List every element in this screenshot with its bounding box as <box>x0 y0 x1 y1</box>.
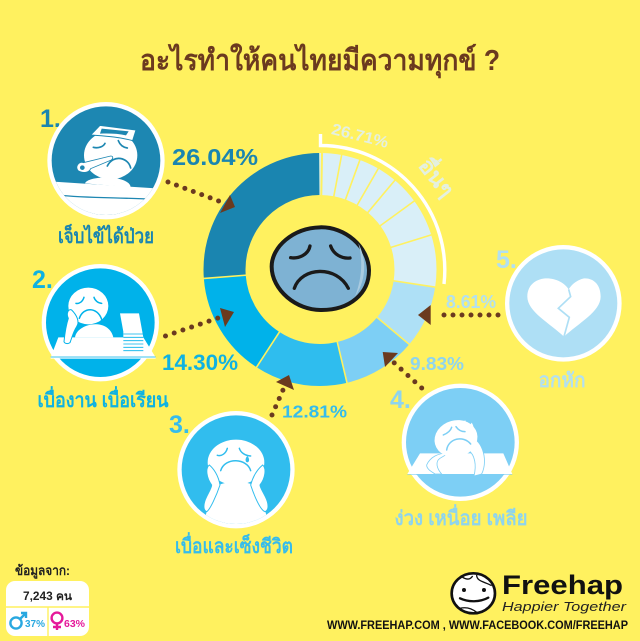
icon: bored at desk <box>42 264 159 381</box>
percent: cause 5: 8.61% <box>446 292 496 312</box>
male share: 37% <box>25 619 45 630</box>
source card background <box>6 581 89 636</box>
percent: cause 2: 14.30% <box>162 350 238 375</box>
icon: sick face with thermometer <box>47 102 165 223</box>
panel: cause 5 heartbroken <box>496 245 622 392</box>
female share: 63% <box>64 619 85 630</box>
icon: sad face centre <box>272 227 369 310</box>
arrow: cause 4 to segment <box>383 352 422 388</box>
icon: broken heart <box>505 245 622 362</box>
rank number 1: 1. <box>40 105 61 133</box>
panel: cause 1 sick <box>40 102 165 248</box>
label: sleepy, tired, exhausted: ง่วง เหนื่อย เพลีย <box>394 503 528 530</box>
label: sick: เจ็บไข้ได้ป่วย <box>58 223 154 248</box>
respondents count: 7,243 คน <box>23 591 72 603</box>
card dividers <box>6 607 89 636</box>
rank number 5: 5. <box>496 246 517 274</box>
arrow: cause 2 to segment <box>166 308 234 336</box>
wordmark: Freehap <box>502 570 623 600</box>
donut chart <box>201 150 438 386</box>
icon: crying face holding cheeks <box>177 411 295 533</box>
arrow: cause 3 to segment <box>272 375 294 415</box>
label: bored and fed up with life: เบื่อและเซ็งชีวิต <box>175 531 293 558</box>
panel: cause 4 sleepy and tired <box>390 384 528 530</box>
percent: cause 1: 26.04% <box>172 144 258 170</box>
title: อะไรทำให้คนไทยมีความทุกข์ ? <box>140 43 500 78</box>
panel: data source <box>6 563 89 636</box>
tagline: Happier Together <box>502 599 627 614</box>
label: bored of work, bored of study: เบื่องาน เบื่อเรียน <box>38 385 169 412</box>
label: other causes: อื่นๆ <box>414 151 462 202</box>
website links: WWW.FREEHAP.COM , WWW.FACEBOOK.COM/FREEHAP <box>327 620 628 632</box>
label: heartbroken: อกหัก <box>538 370 586 392</box>
icon: smiling globe face <box>452 573 495 613</box>
arrow: cause 5 to segment <box>418 305 498 325</box>
percent: cause 4: 9.83% <box>410 354 464 374</box>
label: other causes percent: 26.71% <box>330 121 390 152</box>
rank number 3: 3. <box>169 411 190 439</box>
rank number 4: 4. <box>390 386 411 414</box>
source heading: ข้อมูลจาก: <box>15 563 70 579</box>
logo: Freehap <box>327 570 628 632</box>
panel: cause 3 bored of life <box>169 411 295 558</box>
panel: cause 2 bored of work and study <box>32 264 169 412</box>
bracket: other causes <box>320 134 445 284</box>
percent: cause 3: 12.81% <box>282 402 347 422</box>
icon: tired head on desk <box>402 384 519 501</box>
rank number 2: 2. <box>32 266 53 294</box>
arrow: cause 1 to segment <box>168 182 235 213</box>
icon: male symbol <box>10 613 26 629</box>
icon: female symbol <box>52 613 62 630</box>
